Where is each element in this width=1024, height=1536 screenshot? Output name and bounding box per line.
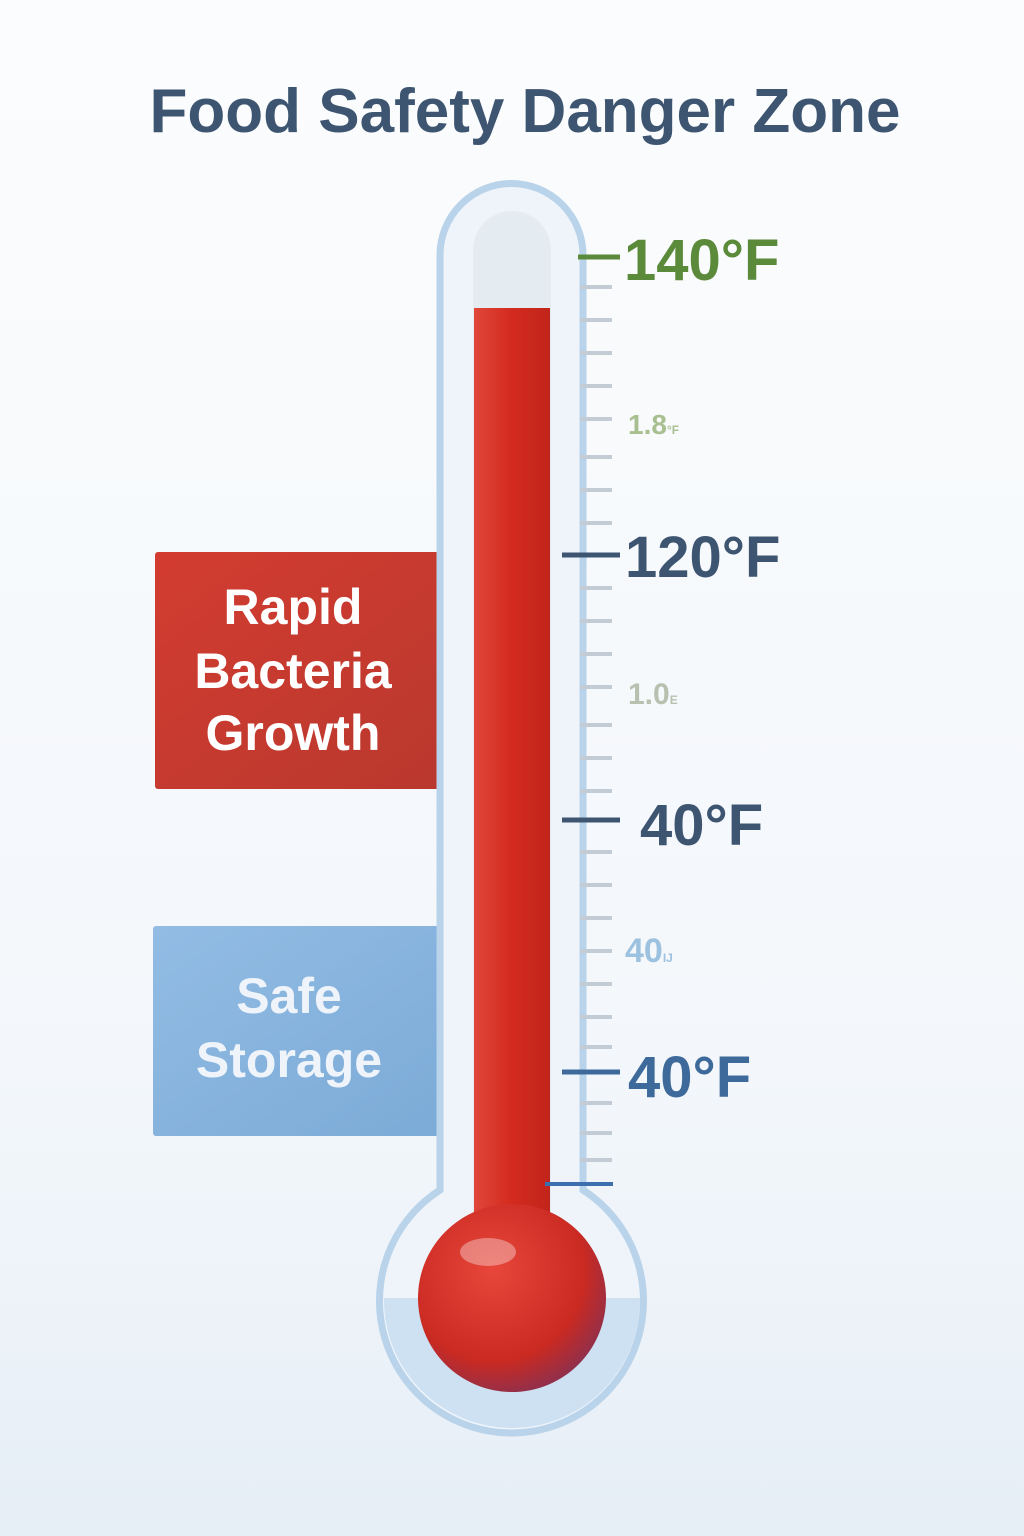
scale ticks (580, 287, 612, 1160)
panel: safe storage: Storage (196, 1032, 382, 1088)
panel: rapid bacteria growth (155, 552, 473, 789)
panel: rapid bacteria growth: Growth (206, 705, 380, 761)
label: 140F: 140°F (624, 228, 779, 293)
label: 40F safe: 40°F (628, 1045, 751, 1110)
label: 40F: 40°F (640, 793, 763, 858)
panel: rapid bacteria growth: Bacteria (194, 643, 393, 699)
panel: safe storage: Safe (236, 968, 342, 1024)
label: 120F: 120°F (625, 525, 780, 590)
label: faint 40: 40IJ (625, 932, 673, 970)
thermometer (380, 184, 644, 1438)
panel: safe storage (153, 926, 473, 1136)
panel: rapid bacteria growth: Rapid (224, 579, 362, 635)
label: faint 1.0: 1.0E (628, 678, 678, 711)
label: faint 1.8: 1.8°F (628, 409, 679, 440)
title: Food Safety Danger Zone (150, 77, 900, 146)
